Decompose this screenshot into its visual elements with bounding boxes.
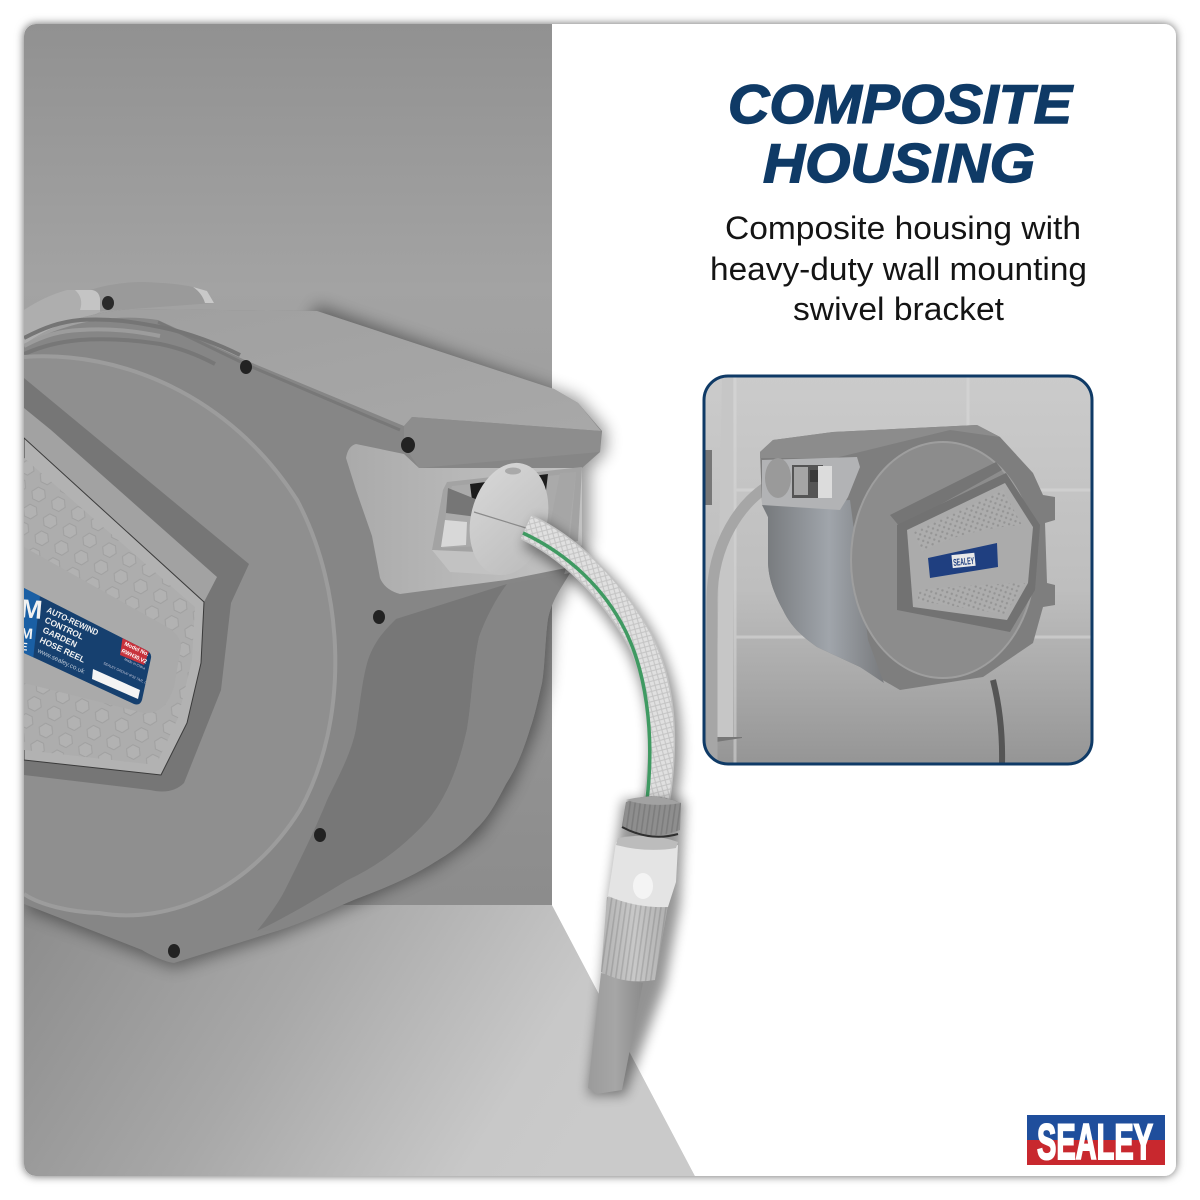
description text: Composite housing with bbox=[725, 210, 1081, 246]
lid lip bbox=[404, 417, 601, 468]
heading bbox=[728, 73, 1074, 194]
description text bbox=[710, 210, 1087, 327]
logo bbox=[1027, 1114, 1165, 1170]
logo in badge bbox=[951, 553, 976, 568]
photo frame bbox=[704, 376, 1092, 764]
label: RWH30.V2 bbox=[120, 648, 148, 665]
logo background bbox=[1027, 1115, 1165, 1140]
diagonal groove bbox=[890, 462, 1002, 527]
heading line 2: HOUSING bbox=[763, 132, 1035, 194]
recess bbox=[897, 473, 1040, 632]
label: HOSE REEL bbox=[38, 635, 87, 665]
connector shadow bbox=[588, 800, 685, 1095]
label: Made in China bbox=[124, 657, 146, 670]
threaded nut bbox=[622, 796, 681, 837]
reel face bbox=[24, 356, 335, 915]
product: hose reel close-up bbox=[19, 282, 685, 1095]
label: Model No. bbox=[123, 641, 150, 658]
swivel bbox=[765, 458, 791, 498]
wall bbox=[24, 24, 552, 905]
reel silhouette bbox=[760, 425, 1055, 690]
wall pipe bbox=[718, 590, 733, 737]
swivel ball bbox=[470, 462, 548, 570]
red model badge bbox=[120, 638, 149, 665]
label: M bbox=[20, 625, 34, 643]
label bbox=[24, 588, 152, 704]
reel body bbox=[24, 309, 602, 963]
disc bbox=[851, 442, 1035, 678]
opening bbox=[432, 467, 582, 575]
white barcode bar bbox=[92, 669, 140, 699]
side band outer bbox=[474, 573, 570, 830]
blue badge bbox=[928, 543, 998, 578]
ribbed grip bbox=[601, 897, 668, 981]
label title: AUTO-REWIND bbox=[45, 605, 100, 637]
face rim highlight bbox=[24, 356, 335, 915]
white coupling bbox=[608, 836, 678, 907]
inset photo bbox=[704, 376, 1092, 764]
description text: swivel bracket bbox=[793, 291, 1004, 327]
description text: heavy-duty wall mounting bbox=[710, 251, 1087, 287]
raised centre bbox=[24, 547, 181, 713]
recess light rim bbox=[24, 408, 217, 602]
hose left bbox=[706, 484, 762, 760]
label: GARDEN bbox=[41, 625, 79, 649]
reel shadow bbox=[24, 305, 606, 968]
mounting holes bbox=[168, 360, 415, 958]
bracket bbox=[24, 282, 214, 345]
label: M bbox=[19, 593, 44, 625]
hose shadow bbox=[530, 532, 666, 805]
plate recess bbox=[24, 378, 249, 791]
plate bbox=[907, 483, 1033, 620]
spray nozzle pipe bbox=[588, 973, 630, 1094]
side band dark bbox=[257, 584, 507, 931]
label: www.sealey.co.uk bbox=[35, 647, 86, 676]
textured bottom bbox=[918, 583, 1025, 614]
garden hose bbox=[523, 527, 662, 805]
label: SEALEY GROUP IP32 7AR, UK bbox=[103, 661, 150, 686]
label: E bbox=[20, 641, 28, 654]
heading line 1: COMPOSITE bbox=[728, 73, 1074, 135]
floor bbox=[24, 905, 695, 1176]
top plane bbox=[760, 425, 1000, 458]
lid ridge arcs bbox=[24, 319, 400, 430]
top lid bbox=[24, 309, 601, 431]
photo wall bbox=[704, 376, 1092, 764]
textured top bbox=[914, 490, 1022, 552]
opening bbox=[792, 465, 823, 498]
wall mortar lines bbox=[735, 376, 1092, 764]
plate bbox=[24, 438, 204, 775]
label: CONTROL bbox=[43, 615, 85, 642]
silver mouth panel bbox=[346, 444, 582, 594]
inset photo: SEALEY bbox=[953, 556, 975, 569]
silver panel bbox=[762, 457, 860, 510]
reel side gradient bbox=[762, 500, 884, 683]
panel: wall and floor scene bbox=[24, 24, 695, 1176]
hose lower bbox=[993, 680, 1002, 764]
